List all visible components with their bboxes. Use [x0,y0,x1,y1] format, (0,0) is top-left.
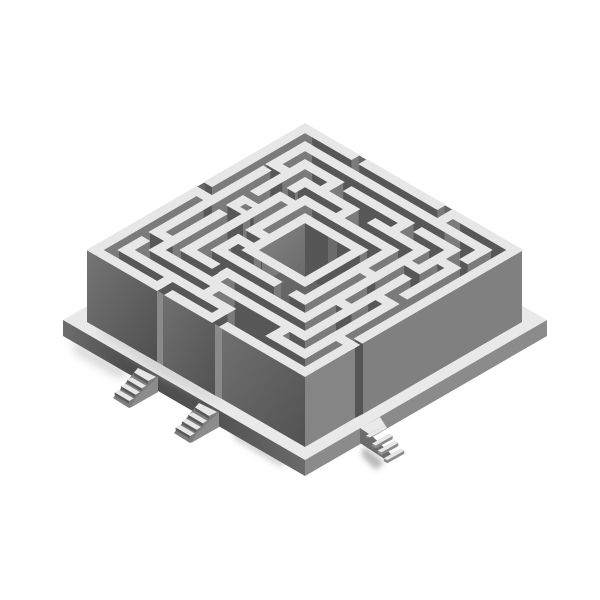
base platform [63,180,547,476]
ground shadows [72,340,384,470]
staircase middle [174,403,219,443]
maze wall tops [88,124,522,376]
maze interior wall faces [42,124,568,430]
central pit [257,222,353,278]
staircase left [113,368,158,408]
staircase right [360,417,404,463]
outer wall faces [87,250,522,447]
